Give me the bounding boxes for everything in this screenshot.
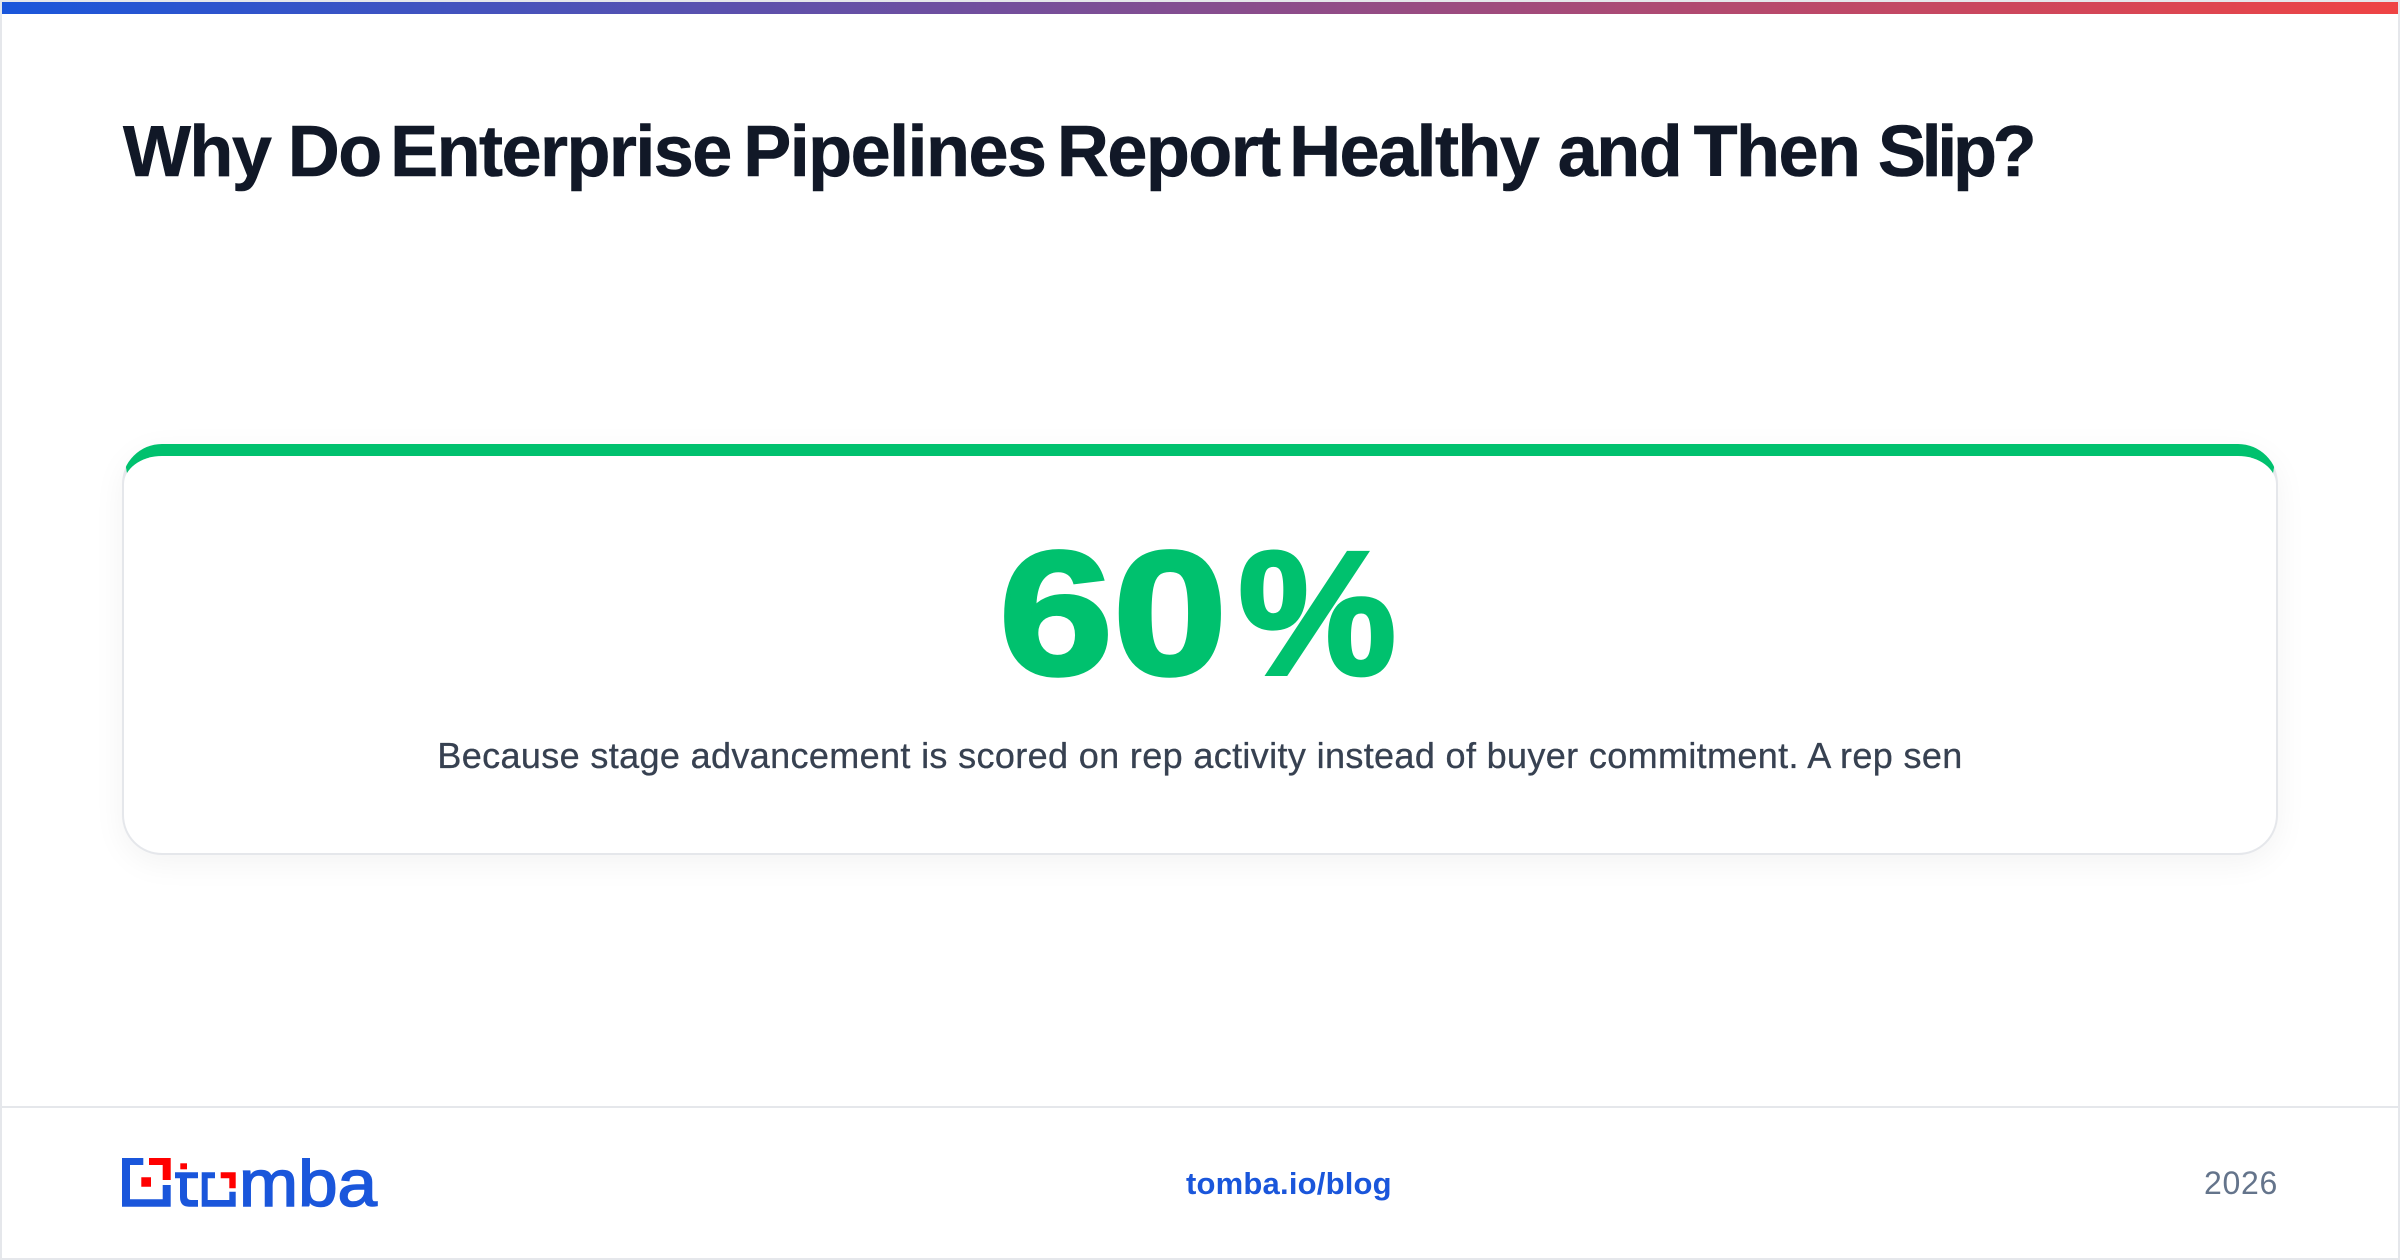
top gradient bar — [2, 2, 2398, 14]
logo letter t — [175, 1172, 198, 1207]
stat value: 60 — [999, 516, 1227, 712]
title: Why Do Enterprise Pipelines Report Healthy and Then Slip? — [123, 112, 2032, 192]
logo mark blue — [122, 1158, 171, 1207]
footer divider — [2, 1106, 2398, 1108]
stat description: Because stage advancement is scored on rep activity instead of buyer commitment. A rep sen — [437, 735, 1963, 776]
logo: tomba — [122, 1158, 378, 1208]
stat value: % — [1238, 516, 1396, 712]
logo t dot — [180, 1163, 187, 1169]
footer year: 2026 — [2204, 1165, 2278, 1201]
logo letter o — [202, 1172, 236, 1207]
logo o accent — [221, 1172, 236, 1188]
stat value — [999, 516, 1396, 712]
footer link: tomba.io/blog — [1186, 1166, 1392, 1201]
panel: stat card — [122, 444, 2278, 855]
logo mark red — [141, 1158, 171, 1187]
